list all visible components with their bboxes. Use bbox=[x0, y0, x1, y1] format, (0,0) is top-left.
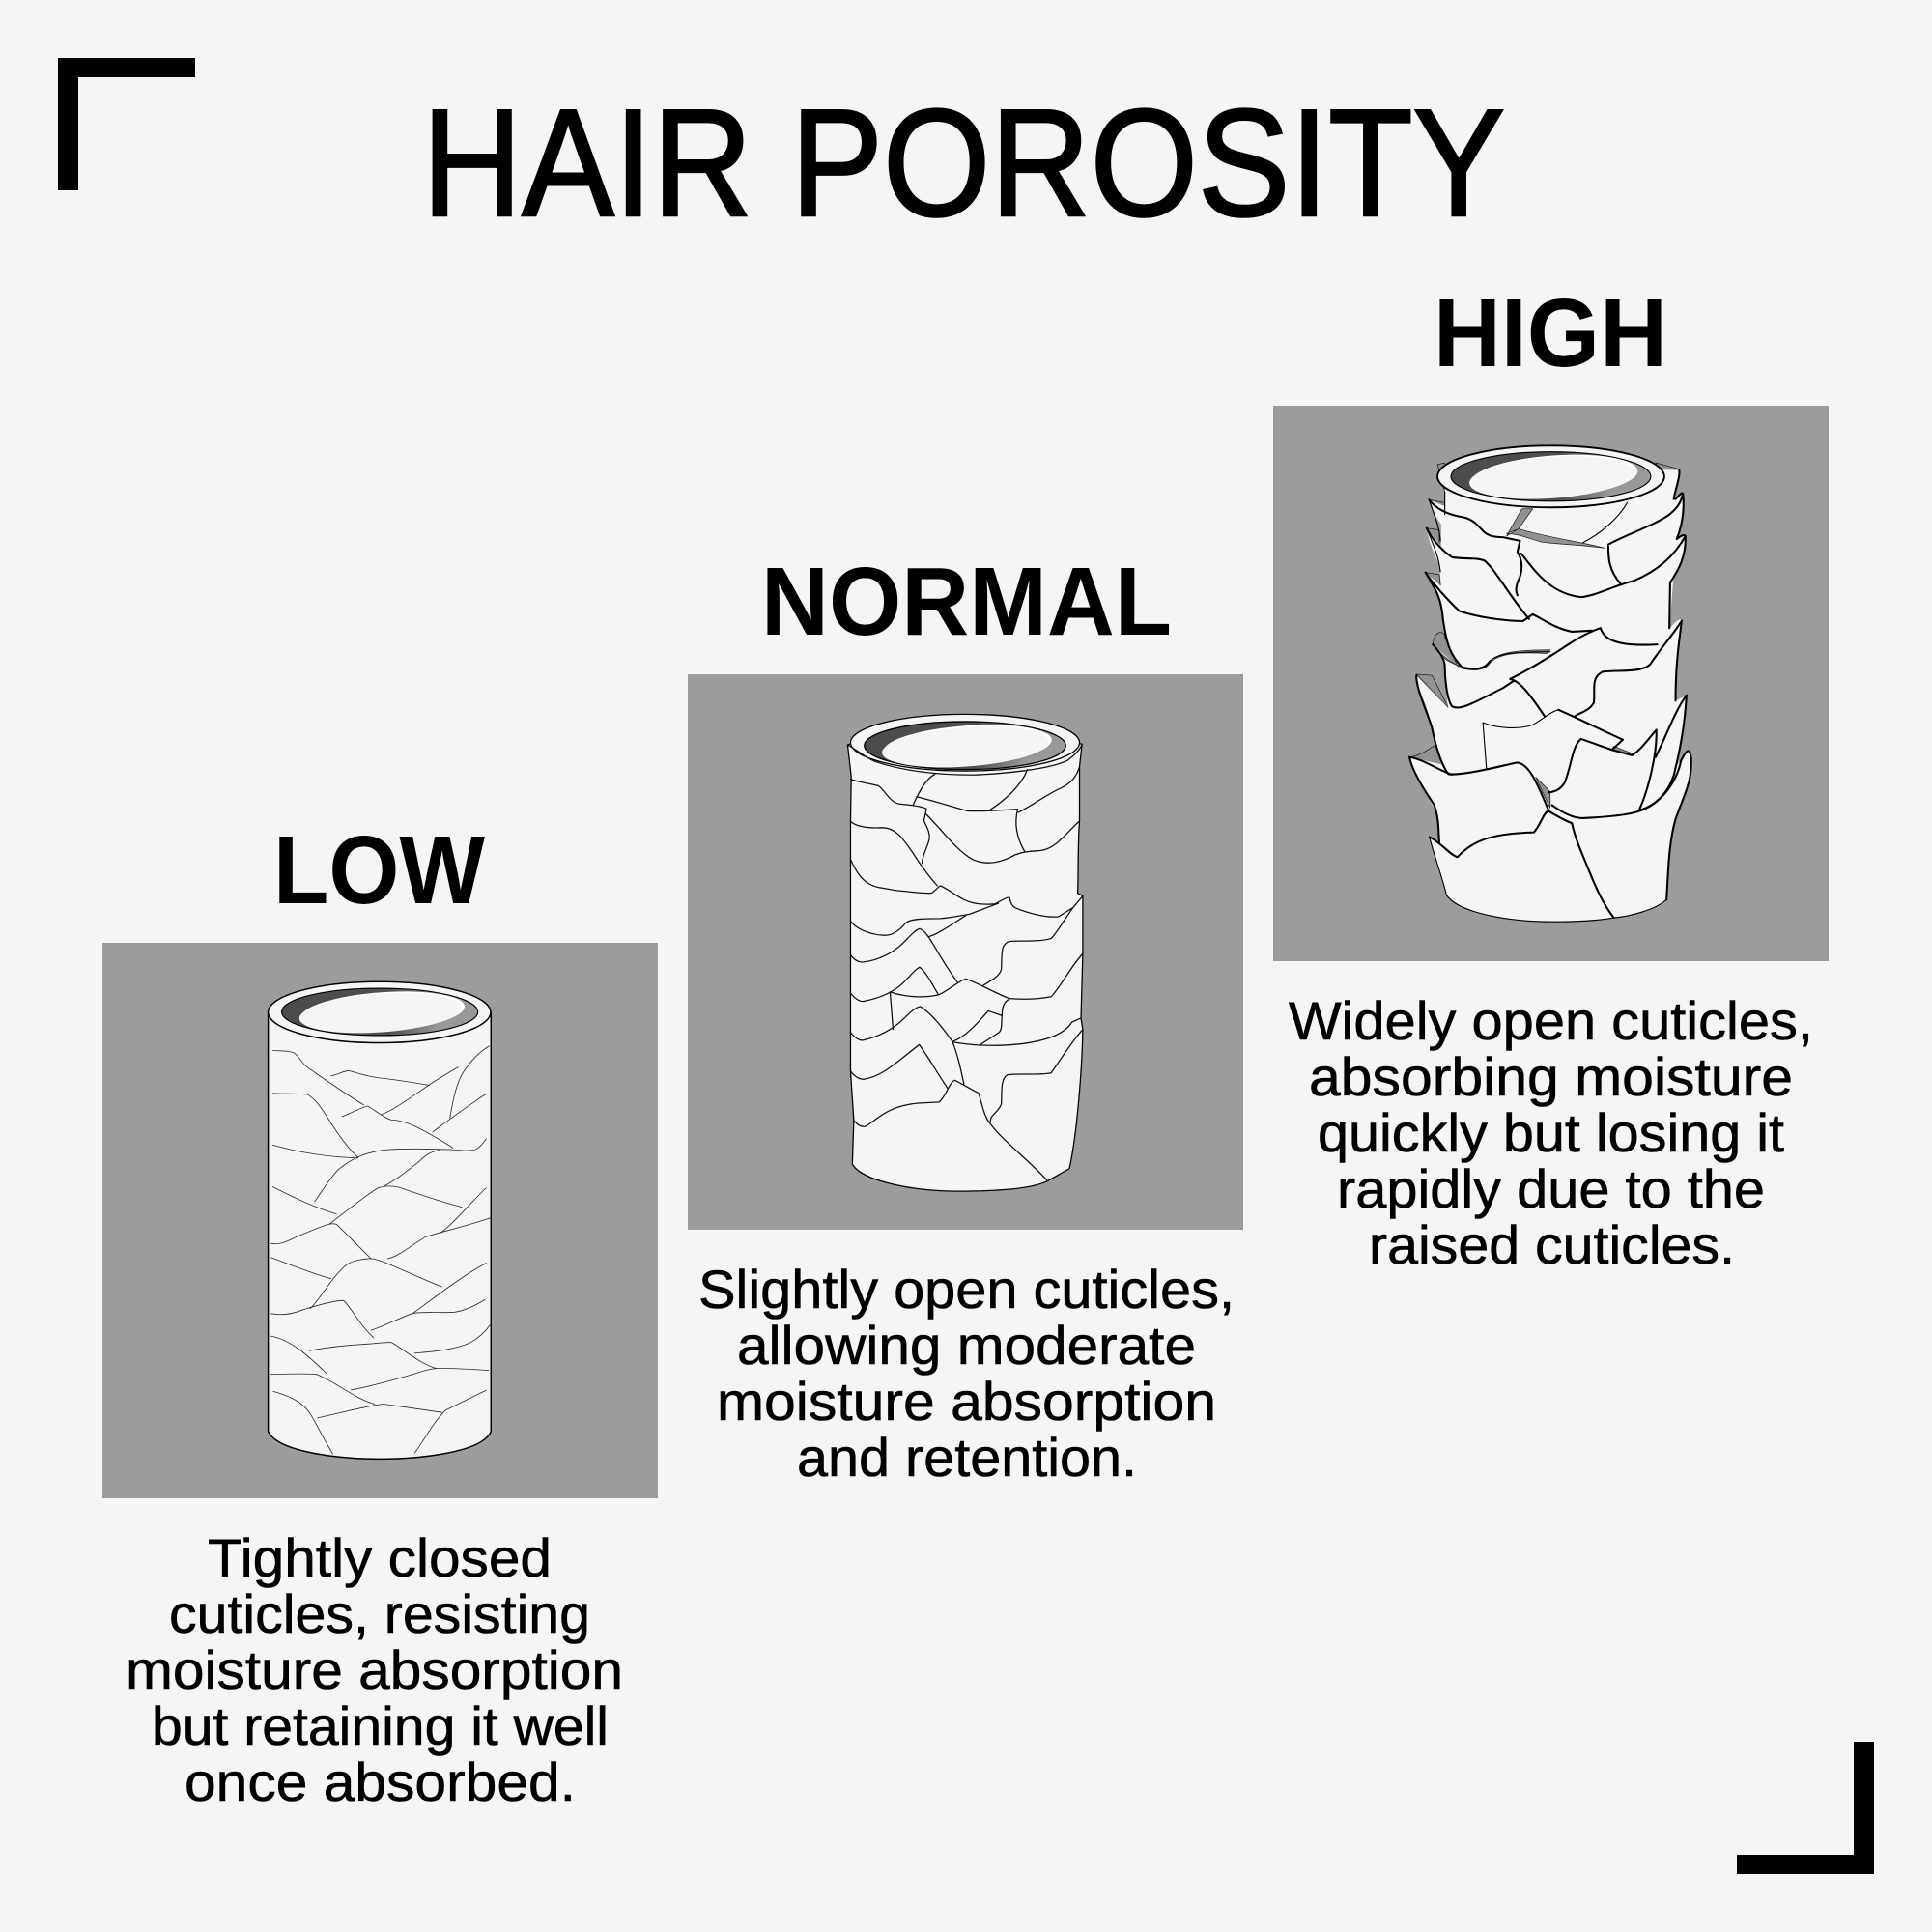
icon: hair strand with slightly open cuticles bbox=[847, 714, 1083, 1191]
high panel background bbox=[1273, 406, 1829, 961]
description: normal: allowing moderate bbox=[737, 1315, 1196, 1376]
description: low: once absorbed. bbox=[185, 1751, 576, 1812]
description: high: rapidly due to the bbox=[1337, 1158, 1765, 1219]
panel: high porosity bbox=[1273, 279, 1829, 1275]
description: high: quickly but losing it bbox=[1318, 1102, 1784, 1163]
heading: low: LOW bbox=[273, 816, 486, 924]
corner bracket: bottom right bbox=[1737, 1742, 1874, 1874]
title: HAIR POROSITY bbox=[422, 78, 1505, 248]
description: high: absorbing moisture bbox=[1309, 1046, 1793, 1107]
description: high: raised cuticles. bbox=[1369, 1214, 1735, 1275]
normal panel background bbox=[688, 674, 1243, 1230]
description: low: cuticles, resisting bbox=[169, 1583, 590, 1644]
panel: normal porosity bbox=[688, 548, 1243, 1488]
corner bracket: top left bbox=[58, 58, 195, 190]
icon: hair strand with widely open cuticles bbox=[1409, 445, 1691, 922]
description: low: Tightly closed bbox=[208, 1527, 552, 1588]
description: normal: moisture absorption bbox=[717, 1371, 1216, 1432]
low panel background bbox=[102, 943, 658, 1498]
description: low bbox=[126, 1527, 623, 1812]
heading: normal: NORMAL bbox=[761, 548, 1172, 656]
description: high bbox=[1289, 990, 1813, 1275]
description: normal: and retention. bbox=[797, 1427, 1137, 1488]
icon: hair strand with closed cuticles bbox=[269, 981, 491, 1459]
panel: low porosity bbox=[102, 816, 658, 1812]
heading: high: HIGH bbox=[1434, 279, 1667, 387]
description: high: Widely open cuticles, bbox=[1289, 990, 1813, 1051]
description: normal bbox=[698, 1259, 1235, 1488]
description: low: moisture absorption bbox=[126, 1639, 623, 1700]
description: low: but retaining it well bbox=[152, 1695, 609, 1756]
description: normal: Slightly open cuticles, bbox=[698, 1259, 1235, 1320]
